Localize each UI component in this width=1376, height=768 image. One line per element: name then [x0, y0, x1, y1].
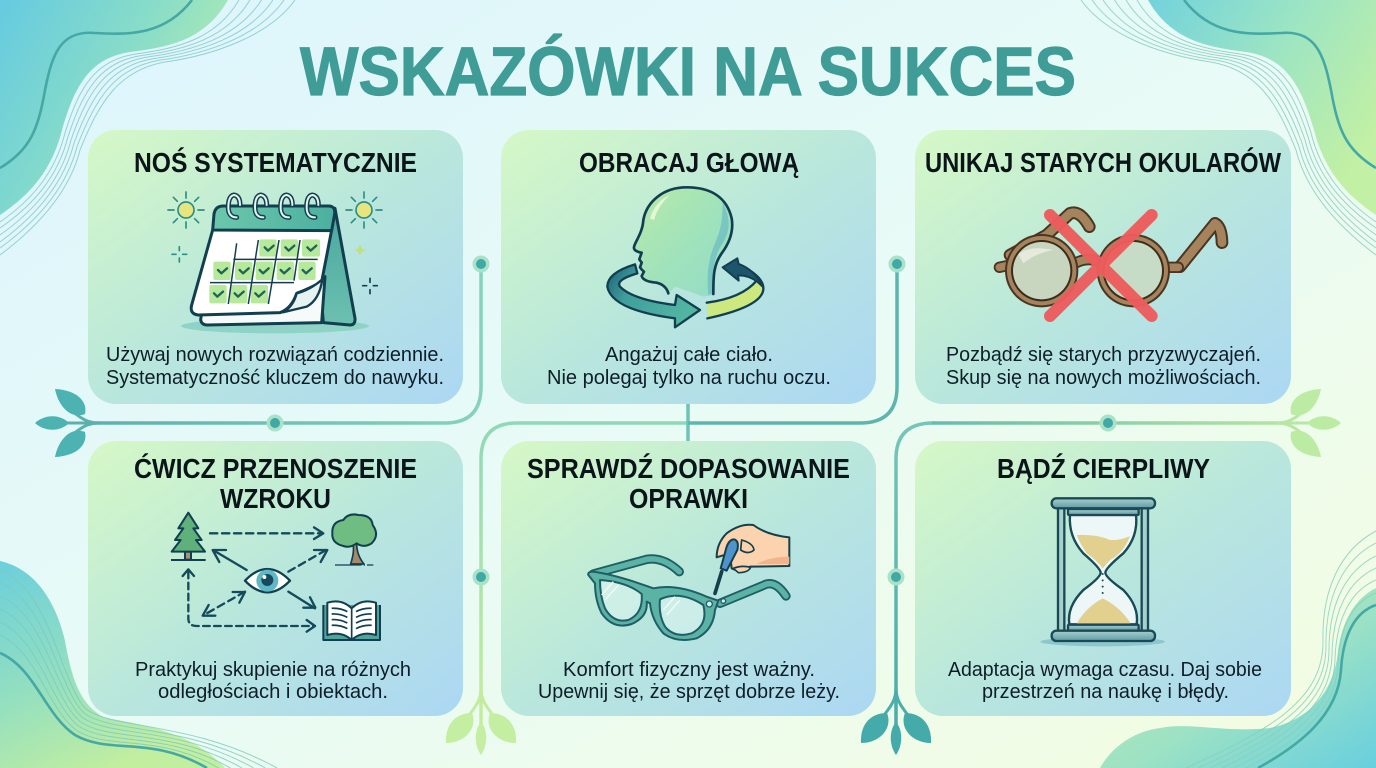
body text: Nie polegaj tylko na ruchu oczu.: [547, 367, 831, 389]
body text: Skup się na nowych możliwościach.: [946, 367, 1261, 389]
body text: Używaj nowych rozwiązań codziennie.: [106, 344, 444, 366]
decoration: bottom-right wave corner: [1100, 531, 1376, 768]
connector: middle-left branch with leaves: [446, 423, 688, 755]
heading: NOŚ SYSTEMATYCZNIE: [134, 147, 417, 178]
heading: WZROKU: [220, 483, 331, 514]
icon: head with rotation arrows: [607, 187, 763, 327]
connector: middle-right branch: [688, 264, 897, 423]
body text: Upewnij się, że sprzęt dobrze leży.: [538, 681, 840, 703]
body text: Angażuj całe ciało.: [605, 344, 773, 366]
heading: [134, 453, 417, 514]
body text: odległościach i obiektach.: [158, 681, 388, 703]
title: WSKAZÓWKI NA SUKCES: [300, 33, 1076, 110]
panel: bądź cierpliwy: [915, 441, 1291, 716]
body text: [135, 659, 411, 703]
heading: ĆWICZ PRZENOSZENIE: [134, 453, 417, 484]
panel: noś systematycznie: [88, 130, 463, 404]
icon: old glasses crossed out: [999, 213, 1222, 316]
connector network: [35, 264, 1341, 755]
heading: [527, 453, 850, 514]
body text: Praktykuj skupienie na różnych: [135, 659, 411, 681]
body text: Pozbądź się starych przyzwyczajeń.: [946, 344, 1261, 366]
panel: obracaj głową: [501, 130, 876, 404]
body text: [946, 344, 1261, 389]
decoration: top-right wave corner: [1081, 0, 1376, 255]
heading: OBRACAJ GŁOWĄ: [579, 147, 799, 178]
body text: przestrzeń na naukę i błędy.: [982, 681, 1229, 703]
decoration: top-left wave corner: [0, 0, 295, 255]
panel: sprawdź dopasowanie oprawki: [501, 441, 876, 716]
decoration: bottom-left wave corner: [0, 561, 277, 768]
panel: unikaj starych okularów: [915, 130, 1291, 404]
body text: Systematyczność kluczem do nawyku.: [106, 367, 444, 389]
heading: OPRAWKI: [629, 483, 748, 514]
body text: Komfort fizyczny jest ważny.: [563, 659, 815, 681]
icon: glasses and hand with screwdriver: [588, 525, 789, 640]
body text: [106, 344, 444, 389]
body text: Adaptacja wymaga czasu. Daj sobie: [948, 659, 1262, 681]
connector: left branch with leaves: [35, 264, 481, 457]
heading: UNIKAJ STARYCH OKULARÓW: [925, 147, 1281, 178]
icon: calendar with checkmarks and suns: [168, 192, 382, 333]
panel: ćwicz przenoszenie wzroku: [88, 441, 463, 716]
icon: eye with focus targets: [171, 513, 380, 640]
heading: SPRAWDŹ DOPASOWANIE: [527, 453, 850, 484]
heading: BĄDŹ CIERPLIWY: [997, 453, 1210, 484]
connector nodes: [266, 256, 1116, 586]
body text: [538, 659, 840, 703]
connector: right branch with leaves: [861, 389, 1341, 755]
connector: centre stem: [686, 404, 690, 441]
icon: hourglass: [1040, 498, 1165, 646]
body text: [948, 659, 1262, 703]
body text: [547, 344, 831, 389]
